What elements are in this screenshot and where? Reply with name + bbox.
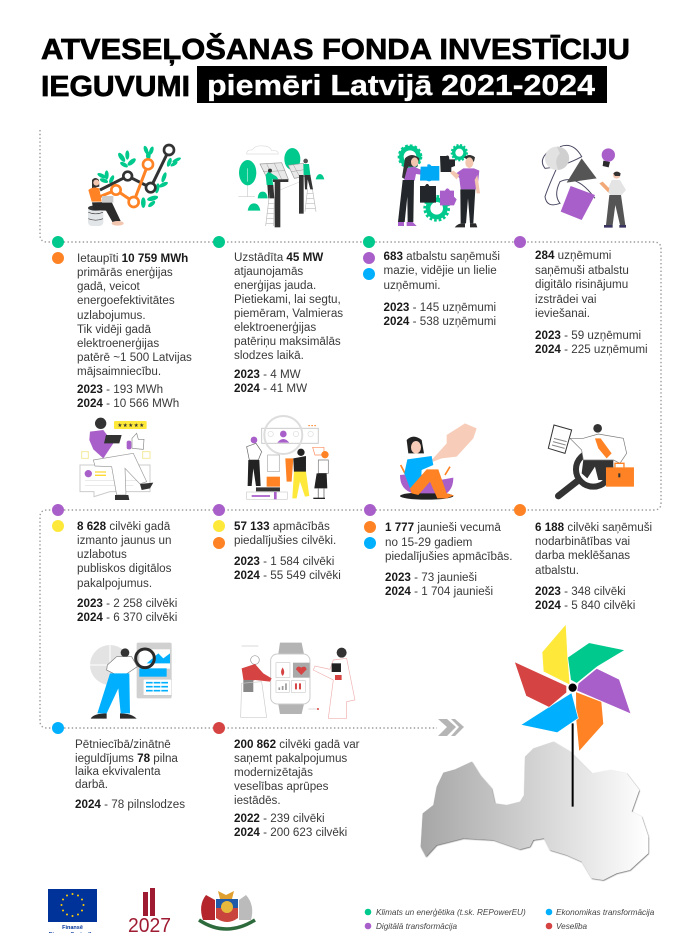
text: digital solutions: ieviešanai. [535,307,590,320]
text: youth [385,521,512,598]
text: energy efficiency: Tik vidēji gadā [77,323,152,336]
legend: Klimats un enerģētika (t.sk. REPowerEU) [376,908,526,917]
text: training: 2023 - 1 584 cilvēki [234,555,334,568]
text: digital solutions: saņēmuši atbalstu [535,264,629,277]
text: health: iestādēs. [234,794,281,807]
illustration: solar panels [238,146,324,227]
text: renewable capacity: enerģijas jauda. [234,279,316,292]
text: renewable capacity: atjaunojamās [234,265,303,278]
chevrons [438,719,464,736]
text: renewable capacity: piemēram, Valmieras [234,307,343,320]
text: renewable capacity: slodzes laikā. [234,349,304,362]
illustration: youth helping hand [400,423,477,500]
title: IEGUVUMI [41,71,190,103]
text: health [234,738,360,839]
text: supported companies: uzņēmumi. [384,279,440,292]
text: employment: atbalstu. [535,564,579,577]
legend: Veselība [556,922,588,931]
text: digital solutions [535,249,648,356]
text: public digital services: izmanto jaunus un [77,534,171,547]
text: public digital services: pakalpojumus. [77,577,152,590]
text: employment [535,521,652,612]
text: digital solutions: 284 uzņēmumi [535,249,611,262]
text: public digital services: 2023 - 2 258 cilvēki [77,597,177,610]
text: research: ieguldījums 78 pilna [75,752,178,765]
text: supported companies [384,250,500,328]
text: renewable capacity: elektroenerģijas [234,321,316,334]
dotted timeline [40,130,661,728]
illustration: public digital services: ★★★★★ [117,423,144,429]
text: youth: 2024 - 1 704 jaunieši [385,585,493,598]
pinwheel [514,624,631,807]
text: digital solutions: digitālo risinājumu [535,278,628,291]
legend [365,908,655,931]
text: renewable capacity: Pietiekami, lai segtu, [234,293,341,306]
text: employment: 2024 - 5 840 cilvēki [535,599,635,612]
text: youth: piedalījušies apmācībās. [385,550,512,563]
illustration: puzzle team [398,145,480,227]
logo: coat of arms [199,891,255,929]
text: energy efficiency: 2024 - 10 566 MWh [77,397,179,410]
illustration: research [90,643,172,719]
text: training: 2024 - 55 549 cilvēki [234,569,341,582]
text: energy efficiency: gadā, veicot [77,280,141,293]
legend: Digitālā transformācija [376,922,457,931]
text: energy efficiency: uzlabojumus. [77,309,146,322]
logo: EU flag [48,889,97,933]
text: digital solutions: 2024 - 225 uzņēmumi [535,343,648,356]
text: digital solutions: 2023 - 59 uzņēmumi [535,329,641,342]
text: research: Pētniecībā/zinātnē [75,738,171,751]
text: employment: 6 188 cilvēki saņēmuši [535,521,652,534]
illustration: public digital services [80,418,153,500]
text: public digital services: 8 628 cilvēki gadā [77,520,171,533]
text: supported companies: 683 atbalstu saņēmuši [384,250,500,263]
text: employment: 2023 - 348 cilvēki [535,585,626,598]
text: renewable capacity: 2023 - 4 MW [234,368,301,381]
illustration: energy efficiency chart [88,145,182,226]
text: research: darbā. [75,778,108,791]
map of Latvia [421,742,648,880]
text: energy efficiency: primārās enerģijas [77,266,173,279]
illustration: health watch [241,643,355,718]
text: training: piedalījušies cilvēki. [234,534,336,547]
logo: EU flag: Finansē [62,925,83,931]
text: employment: darba meklēšanas [535,549,630,562]
text: health: 2022 - 239 cilvēki [234,812,325,825]
text: youth: 1 777 jaunieši vecumā [385,521,501,534]
text: digital solutions: izstrādei vai [535,293,596,306]
text: energy efficiency: 2023 - 193 MWh [77,383,163,396]
illustration: training participants [247,416,329,499]
text: energy efficiency: energoefektivitātes [77,294,175,307]
text: health: 200 862 cilvēki gadā var [234,738,360,751]
text: renewable capacity [234,251,343,395]
text: energy efficiency: Ietaupīti 10 759 MWh [77,252,188,265]
text: public digital services: uzlabotus [77,548,127,561]
title: piemēri Latvijā 2021-2024 [207,70,595,102]
illustration: job search [548,424,634,496]
text: youth: no 15-29 gadiem [385,536,472,549]
text: research: 2024 - 78 pilnslodzes [75,798,185,811]
text: renewable capacity: 2024 - 41 MW [234,382,307,395]
text: energy efficiency: mājsaimniecību. [77,365,161,378]
text: public digital services: publiskos digitālos [77,562,172,575]
text: supported companies: 2023 - 145 uzņēmumi [384,301,496,314]
logo: 2027 [128,888,171,933]
text: supported companies: 2024 - 538 uzņēmumi [384,315,496,328]
text: energy efficiency: elektroenerģijas [77,337,159,350]
text: public digital services [77,520,177,624]
text: supported companies: mazie, vidējie un lielie [384,264,497,277]
text: research: laika ekvivalenta [75,765,161,778]
illustration: digital solutions [542,145,626,228]
text: employment: nodarbinātības vai [535,535,630,548]
title: ATVESEĻOŠANAS FONDA INVESTĪCIJU [41,32,630,66]
text: training: 57 133 apmācībās [234,520,330,533]
text: youth: 2023 - 73 jaunieši [385,571,477,584]
text: health: 2024 - 200 623 cilvēki [234,826,347,839]
text: public digital services: 2024 - 6 370 cilvēki [77,611,177,624]
text: renewable capacity: Uzstādīta 45 MW [234,251,323,264]
text: health: modernizētajās [234,766,313,779]
text: renewable capacity: patēriņu maksimālās [234,335,341,348]
text: energy efficiency: patērē ~1 500 Latvijas [77,351,192,364]
text: health: saņemt pakalpojumus [234,752,347,765]
legend: Ekonomikas transformācija [556,908,655,917]
title [41,32,630,103]
text: health: veselības aprūpes [234,780,329,793]
text: energy efficiency [77,252,192,410]
text: research [75,738,185,811]
timeline markers [52,236,526,734]
text: training [234,520,341,582]
